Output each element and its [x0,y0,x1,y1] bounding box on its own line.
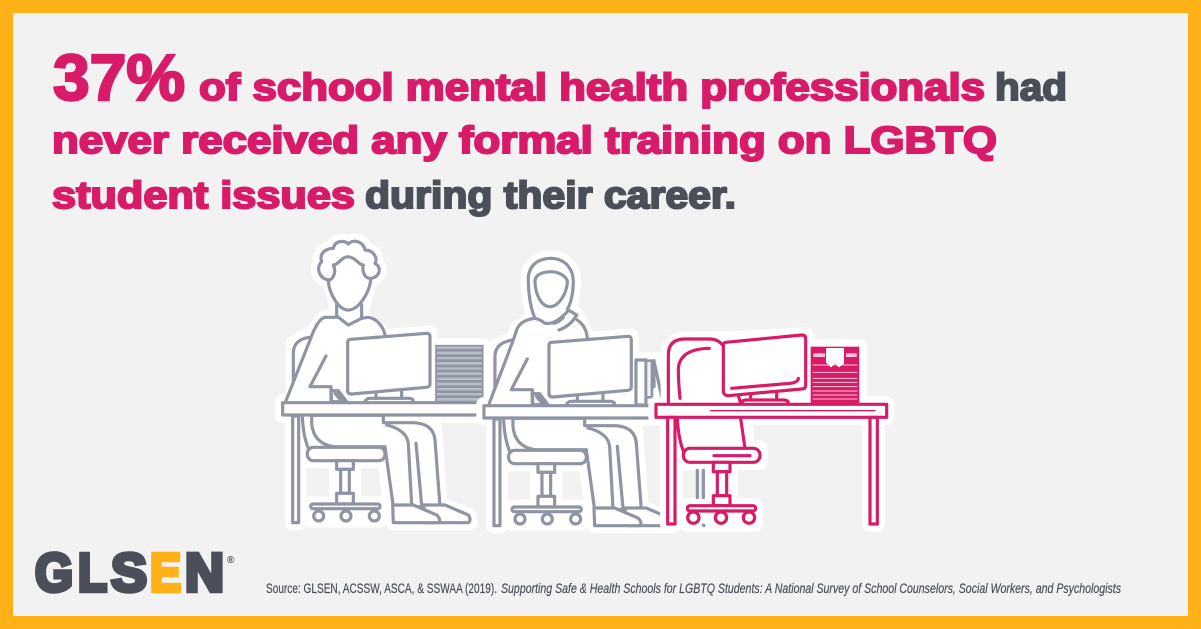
headline: during their career. [365,175,736,217]
headline line one: of school mental health professionals [199,67,985,109]
GLSEN logo: ® [227,555,235,566]
source citation [266,581,1121,596]
GLSEN logo: N [185,543,224,603]
headline line two: never received any formal training on LGBTQ [52,120,997,162]
GLSEN logo: S [111,543,147,603]
stack of books [436,346,483,402]
upright books [636,360,662,405]
big statistic: 37% [53,41,185,114]
empty desk in pink [656,335,887,526]
small grey mark [699,520,709,530]
source citation: Source: GLSEN, ACSSW, ASCA, & SSWAA (2019). [266,581,497,596]
chair back [668,339,724,403]
person two at desk wearing hijab [484,258,685,526]
seat and base [683,448,760,523]
GLSEN logo: L [78,543,107,603]
headline line three: student issues [52,175,355,217]
GLSEN logo: E [150,543,181,603]
torso [286,310,385,401]
GLSEN logo: G [35,543,73,603]
chair back [293,337,310,393]
person one at desk with curly hair [283,241,483,523]
torso [490,317,587,403]
GLSEN logo [35,543,235,603]
hijab and face [528,258,577,330]
headline: had [995,67,1067,109]
white halo [656,335,887,524]
book with bookmark [811,347,859,403]
headline [52,41,1067,217]
monitor [723,335,806,403]
chair back [495,340,513,397]
hair and face [319,241,379,310]
hidden grey chair remnants [697,470,703,498]
illustration: three desks [283,241,887,526]
desk top and legs [656,404,887,524]
